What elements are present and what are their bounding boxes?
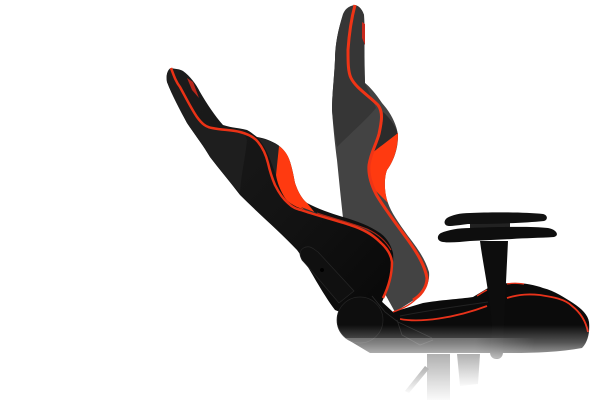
reclined headrest logo	[187, 78, 199, 98]
gas lift	[457, 354, 480, 386]
reclined upper thin stripe	[317, 213, 391, 250]
left fade on mechanism	[335, 338, 535, 358]
raised arm pad	[445, 212, 547, 226]
lowered arm pad	[438, 227, 557, 242]
seat top crease	[400, 302, 488, 316]
mechanism linkage	[372, 296, 433, 345]
reclined carbon panel	[167, 68, 247, 193]
arm post	[480, 241, 508, 359]
armrest	[438, 212, 557, 359]
seat cushion	[350, 283, 589, 353]
upright carbon upper panel	[332, 5, 376, 147]
upright shell	[332, 5, 429, 312]
reclined side bolster dark	[258, 138, 279, 175]
reclined backrest	[167, 68, 393, 320]
upright backrest	[332, 5, 429, 312]
mechanism body	[345, 300, 435, 353]
pivot disc	[337, 297, 383, 343]
bottom white fade	[300, 325, 600, 360]
pad connector	[470, 222, 510, 229]
reclined red stripe	[171, 68, 392, 298]
seat shell	[350, 283, 589, 353]
base leg	[405, 366, 429, 393]
reclined shell	[167, 68, 393, 320]
recline mechanism	[300, 247, 435, 353]
upright side bolster dark	[373, 112, 398, 153]
reclined stripe band fill	[301, 207, 380, 240]
reclined orange panel	[276, 146, 316, 214]
upright headrest logo	[362, 22, 365, 45]
upright orange panel	[370, 133, 398, 203]
bracket arm	[300, 247, 354, 303]
bracket bolt	[320, 268, 324, 272]
upright red stripe	[348, 5, 427, 300]
seat rear red stripe	[393, 283, 524, 312]
chair base fading out	[405, 354, 480, 400]
seat red stripe	[400, 294, 588, 332]
centre column	[427, 354, 450, 400]
